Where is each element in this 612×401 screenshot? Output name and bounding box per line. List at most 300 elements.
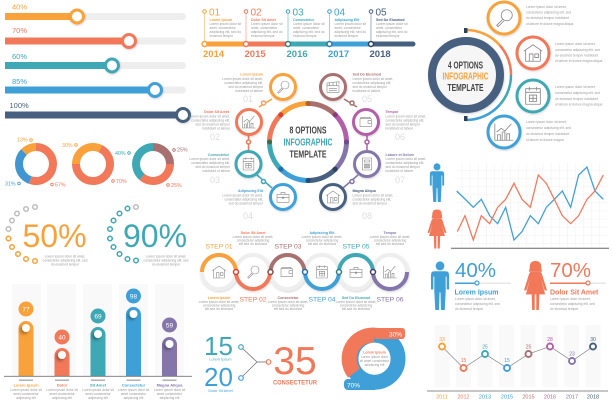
data values (439, 337, 596, 364)
title: TEMPLATE (448, 83, 484, 94)
column labels: Sit Amet (90, 382, 107, 388)
column 5 (162, 318, 177, 376)
step top notes: elit sed do eiusmod (239, 242, 267, 246)
milestone 2018: 05 (376, 8, 387, 18)
gray rings (202, 255, 407, 289)
bar 70%: 70% (12, 26, 27, 35)
step top notes: Lorem ipsum dolor sit amet, (302, 235, 342, 239)
option 5: incididunt ut labore (352, 89, 380, 93)
data values: 15 (461, 358, 466, 364)
dot ring (108, 205, 138, 263)
caption: Lorem ipsum dolor sit amet, (146, 254, 186, 258)
year labels: 2018 (587, 394, 599, 400)
step bottom notes: Lorem ipsum dolor sit amet, (268, 300, 308, 304)
option: search (488, 2, 573, 34)
step headings: STEP 06 (376, 296, 404, 304)
blue segment 70% (344, 335, 398, 390)
label: Dolor Sit Amet (550, 290, 599, 296)
donut 1: 13% (17, 138, 28, 144)
milestone 2016: Lorem ipsum dolor sit (293, 22, 325, 26)
data values: 30 (590, 337, 596, 343)
option: search: Lorem ipsum dolor sit amet, (526, 5, 567, 9)
column 2: 40 (58, 334, 66, 342)
step bottom notes: Lorem ipsum dolor sit amet, (199, 300, 239, 304)
step icons (212, 265, 397, 278)
milestone 2018: adipiscing elit, sed do (376, 30, 408, 34)
option 7: Labore et Dolore (386, 153, 414, 157)
milestone 2014: 01 (209, 8, 221, 18)
option 2 (189, 110, 262, 142)
option: house: consectetur adipiscing elit, sed (555, 48, 600, 52)
icon: female large (524, 261, 547, 310)
connectors (246, 99, 369, 188)
milestone 2015: adipiscing elit, sed do (251, 30, 283, 34)
option 4: sed do eiusmod tempor (229, 202, 264, 206)
option 7: 07 (395, 175, 405, 185)
milestone 2014: adipiscing elit, sed do (210, 30, 241, 34)
panel: timeline (202, 8, 413, 60)
step bottom notes: elit sed do eiusmod (205, 307, 233, 311)
center note: adipiscing elit (365, 363, 384, 367)
donut 2 (62, 143, 127, 185)
donut 3: 25% (177, 148, 188, 154)
number 15: 15 (204, 331, 233, 361)
option 4: Lorem ipsum dolor sit amet, (222, 194, 263, 198)
data points (439, 344, 596, 371)
step top notes: Lorem ipsum dolor sit amet, (233, 235, 273, 239)
value: 50% (22, 218, 87, 254)
step top notes (233, 231, 410, 246)
caption: do eiusmod tempor (51, 262, 80, 266)
milestone 2014: 2014 (203, 49, 225, 60)
step headings: STEP 03 (274, 244, 302, 250)
option 6: Tempor (386, 110, 399, 114)
icon: male large (431, 261, 449, 310)
panel: column chart (4, 284, 192, 400)
column labels: amet consectetur (121, 392, 147, 396)
year labels: 2015 (501, 394, 513, 400)
column labels: Lorem Ipsum (13, 382, 39, 388)
option 2: Dolor Sit Amet (204, 110, 230, 114)
bar 60%: 60% (12, 52, 27, 61)
number 15: Lorem Ipsum (209, 358, 232, 362)
column labels: adipiscing elit (16, 396, 36, 400)
column labels: Lorem ipsum dolor sit (82, 388, 114, 392)
option 1: Lorem ipsum dolor sit amet, (222, 77, 263, 81)
panel: big numbers (204, 331, 317, 393)
panel: steps (199, 231, 410, 311)
option 4 (222, 184, 296, 221)
milestone 2014: Lorem Ipsum (210, 18, 232, 22)
option 6: sed do eiusmod tempor (386, 122, 421, 126)
milestone 2014: eiusmod tempor (210, 34, 234, 38)
option 4: consectetur adipiscing elit, (224, 198, 263, 202)
caption (43, 254, 88, 266)
center title: TEMPLATE (290, 148, 326, 160)
milestone 2018: 2018 (370, 49, 391, 60)
column 1 (18, 302, 34, 376)
data values: 33 (439, 337, 445, 343)
option 5: consectetur adipiscing elit, (352, 81, 391, 85)
milestone 2018: eiusmod tempor (376, 34, 401, 38)
panel: two-part ring (344, 328, 405, 390)
donut 3: 40% (115, 151, 126, 157)
option 8 (320, 184, 393, 221)
body text (550, 297, 595, 311)
donut 3: 25% (171, 183, 182, 189)
step top notes: Dolor Sit Amet (241, 231, 266, 235)
panel: donut charts (5, 138, 188, 189)
donut 1 (5, 138, 66, 188)
milestone 2018: Sed Do Eiusmod (376, 18, 405, 22)
panel: dotted percent 50 (6, 205, 88, 266)
option 6: consectetur adipiscing elit, (386, 118, 424, 122)
option: search: do eiusmod tempor incididunt (526, 16, 569, 20)
number 35: 35 (273, 340, 317, 383)
step bottom notes: elit sed do eiusmod (274, 307, 302, 311)
option: chart: do eiusmod tempor incididunt (526, 132, 569, 136)
milestone 2018: amet, consectetur (376, 26, 403, 30)
option: chart: Lorem ipsum dolor sit amet, (526, 120, 567, 124)
option: calendar: ut labore et dolore magna aliqua (555, 102, 602, 106)
icon: male (430, 163, 444, 202)
step bottom notes: consectetur adipiscing (340, 304, 372, 308)
red segment 30% (349, 328, 405, 373)
center title (284, 124, 333, 160)
column labels: Lorem ipsum dolor sit (154, 388, 185, 392)
panel: 8 options circle (189, 72, 426, 221)
year labels (436, 394, 599, 400)
red line (457, 175, 603, 240)
milestone 2015: Lorem ipsum dolor sit (251, 22, 283, 26)
panel: 4 options circle (432, 2, 602, 148)
option 7: incididunt ut labore (386, 169, 413, 173)
milestone 2014: Lorem ipsum dolor sit (210, 22, 241, 26)
option 3: consectetur adipiscing elit, (191, 161, 230, 165)
step top notes: consectetur adipiscing (306, 238, 338, 242)
option 7: Lorem ipsum dolor sit amet, (386, 157, 426, 161)
bar 70% (5, 26, 186, 48)
option 5 (320, 72, 393, 104)
milestone 2017: Adipiscing Elit (334, 18, 360, 22)
year labels: 2011 (436, 394, 448, 400)
option: chart (488, 116, 571, 148)
option 8: Lorem ipsum dolor sit amet, (352, 194, 393, 198)
option 7: sed do eiusmod tempor (386, 165, 421, 169)
value: 90% (123, 218, 187, 254)
milestone 2015: Dolor Sit Amet (251, 18, 277, 22)
option 4: Adipiscing Elit (238, 189, 264, 193)
milestone 2015: 02 (250, 8, 262, 18)
data values: 23 (569, 352, 575, 358)
option 3: incididunt ut labore (202, 169, 230, 173)
option 2: sed do eiusmod tempor (196, 122, 231, 126)
caption: consectetur adipiscing elit, sed (144, 258, 189, 262)
data values: 25 (482, 344, 488, 350)
panel: female stat (524, 259, 606, 311)
labels: 70% (347, 382, 360, 390)
option 6: incididunt ut labore (386, 126, 413, 130)
year labels: 2017 (566, 394, 578, 400)
body text: consectetur adipiscing elit, sed (550, 302, 595, 306)
donut 2: 70% (116, 179, 127, 185)
donut 3 (115, 147, 188, 189)
step bottom notes: consectetur adipiscing (272, 304, 304, 308)
column 4 (126, 288, 141, 376)
dot ring (6, 205, 37, 263)
column 5: 59 (166, 322, 173, 330)
column labels: amet consectetur (49, 392, 76, 396)
option: house (517, 37, 602, 69)
bar 40%: 40% (12, 2, 27, 12)
icon: female (428, 210, 446, 248)
bar 60% (5, 52, 186, 72)
trend line (442, 346, 593, 368)
milestone 2017: eiusmod tempor (334, 34, 359, 38)
column labels (10, 380, 185, 400)
milestone 2016: amet, consectetur (293, 26, 320, 30)
milestone 2017 (327, 8, 366, 60)
year labels: 2012 (457, 394, 470, 400)
step top notes: Adipiscing Elit (310, 231, 335, 235)
option 4: 04 (243, 211, 253, 221)
column labels: adipiscing elit (52, 396, 72, 400)
body text: do eiusmod tempor (550, 307, 579, 311)
center note (358, 343, 390, 375)
option 1: incididunt ut labore (235, 89, 263, 93)
option 1: consectetur adipiscing elit, (224, 81, 263, 85)
panel: dotted percent 90 (108, 205, 189, 266)
body text: Lorem ipsum dolor sit amet, (455, 297, 496, 301)
option: chart: consectetur adipiscing elit, sed (526, 126, 571, 130)
step top notes: Lorem ipsum dolor sit amet, (370, 235, 410, 239)
column labels: Lorem ipsum dolor sit (118, 388, 149, 392)
milestone 2018 (368, 8, 408, 60)
option: search: consectetur adipiscing elit, sed (526, 10, 571, 14)
step bottom notes: Sed Do Eiusmod (342, 296, 370, 300)
milestone 2016: 2016 (286, 49, 308, 60)
option: calendar: Lorem ipsum dolor sit amet, (555, 85, 596, 89)
timeline bar (204, 42, 413, 46)
step top notes: elit sed do eiusmod (376, 242, 404, 246)
bar 85% (5, 77, 186, 96)
step bottom notes: consectetur adipiscing (203, 304, 235, 308)
option: search: ut labore et dolore magna aliqua (526, 22, 573, 26)
bar 85%: 85% (12, 77, 27, 86)
number 20: 20 (204, 362, 233, 392)
number 35: CONSECTETUR (273, 380, 317, 386)
option: house: do eiusmod tempor incididunt (555, 54, 598, 58)
option 5: Sed Do Eiusmod (352, 72, 381, 76)
caption: Lorem ipsum dolor sit amet, (45, 254, 85, 258)
title: INFOGRAPHIC (442, 72, 488, 82)
option: chart: ut labore et dolore magna (526, 138, 564, 142)
option 8: 08 (362, 211, 372, 221)
option: house: ut labore et dolore magna aliqua (555, 59, 602, 63)
column labels: Dolor (57, 382, 68, 388)
step top notes: consectetur adipiscing (237, 238, 269, 242)
year labels: 2016 (544, 394, 556, 400)
option 8: sed do eiusmod tempor (352, 202, 388, 206)
labels: 30% (389, 332, 402, 338)
background columns (434, 325, 600, 387)
option 3: Consectetur (208, 153, 230, 157)
milestone 2017: amet, consectetur (334, 26, 362, 30)
data values: 28 (547, 337, 553, 343)
milestone 2016: 03 (292, 8, 304, 18)
center note: Lorem Ipsum (363, 350, 386, 354)
labels (347, 332, 402, 390)
junction rings (234, 270, 376, 274)
step bottom notes: elit sed do eiusmod (342, 307, 370, 311)
option 2: incididunt ut labore (202, 126, 230, 130)
option 1: sed do eiusmod tempor (229, 85, 264, 89)
step bottom notes (199, 296, 376, 311)
milestone 2015: eiusmod tempor (251, 34, 276, 38)
year labels: 2015 (522, 394, 535, 400)
milestone 2017: Lorem ipsum dolor sit (334, 22, 366, 26)
step headings: STEP 05 (342, 244, 370, 250)
donut 1: 31% (5, 182, 16, 188)
title: 4 OPTIONS (448, 60, 483, 72)
option: calendar (517, 80, 602, 112)
step bottom notes: Lorem Ipsum (208, 296, 230, 300)
step headings: STEP 04 (308, 296, 336, 304)
milestone 2015 (244, 8, 283, 60)
milestone 2016: Consectetur (293, 18, 315, 22)
caption: do eiusmod tempor (152, 262, 181, 266)
column labels: adipiscing elit (160, 396, 179, 400)
option 1: Lorem Ipsum (240, 72, 263, 76)
step top notes: consectetur adipiscing (374, 238, 406, 242)
slider (455, 281, 511, 285)
option 1: 01 (243, 94, 253, 104)
data values: 25 (526, 344, 531, 350)
data values: 15 (504, 358, 510, 364)
option 1 (222, 72, 296, 104)
year labels: 2013 (479, 394, 491, 400)
column 3: 69 (94, 314, 102, 320)
step bottom notes: Consectetur (278, 296, 299, 300)
option 3 (189, 152, 261, 185)
step top notes: Tempor (384, 231, 397, 235)
option: calendar: consectetur adipiscing elit, sed (555, 91, 600, 95)
milestone 2015: 2015 (244, 49, 266, 60)
milestone 2015: amet, consectetur (251, 26, 278, 30)
milestone 2016: eiusmod tempor (293, 34, 318, 38)
panel: male stat (431, 259, 511, 311)
option 5: 05 (362, 94, 372, 104)
background columns (12, 284, 184, 376)
option 6 (354, 110, 426, 142)
slider (550, 281, 606, 285)
milestone 2018: Lorem ipsum dolor sit (376, 22, 408, 26)
center title: INFOGRAPHIC (284, 136, 333, 148)
label: Lorem Ipsum (454, 290, 498, 296)
column labels: amet consectetur (157, 392, 183, 396)
body text: do eiusmod tempor (455, 307, 484, 311)
center note: Lorem ipsum dolor (361, 355, 389, 359)
outer arc (464, 28, 511, 121)
donut 1: 67% (55, 182, 66, 188)
column 2 (54, 330, 70, 376)
donut 2: 30% (62, 143, 73, 149)
option 3: 03 (210, 175, 220, 185)
caption (144, 254, 189, 266)
option 7 (354, 152, 426, 185)
option 5: sed do eiusmod tempor (352, 85, 388, 89)
panel: progress bars (5, 2, 190, 122)
connector (239, 345, 271, 380)
milestone 2014 (202, 8, 241, 60)
column labels: adipiscing elit (88, 396, 108, 400)
milestone 2016: adipiscing elit, sed do (293, 30, 325, 34)
main ring (432, 41, 500, 109)
value: 70% (550, 259, 591, 282)
colored arcs (202, 255, 407, 289)
option 8: consectetur adipiscing elit, (352, 198, 391, 202)
step headings (205, 244, 404, 304)
milestone 2014: amet, consectetur (210, 26, 237, 30)
option 8: Magna Aliqua (352, 189, 377, 193)
option 3: Lorem ipsum dolor sit amet, (189, 157, 230, 161)
option 5: Lorem ipsum dolor sit amet, (352, 77, 393, 81)
option: calendar: do eiusmod tempor incididunt (555, 97, 598, 101)
option 3: sed do eiusmod tempor (196, 165, 231, 169)
option 2: 02 (210, 132, 220, 142)
body text: Lorem ipsum dolor sit amet, (550, 297, 591, 301)
column labels: Lorem ipsum dolor sit (46, 388, 78, 392)
column labels: Lorem ipsum dolor sit (10, 388, 42, 392)
title (442, 60, 488, 94)
central ring (270, 104, 346, 180)
value: 40% (455, 259, 496, 282)
bar 40% (5, 2, 186, 23)
center title: 8 OPTIONS (290, 124, 326, 136)
milestone 2016 (286, 8, 325, 60)
body text (455, 297, 500, 311)
chart grid (457, 163, 607, 247)
panel: year line chart (427, 325, 608, 400)
panel: line chart with people (428, 163, 609, 248)
step headings: STEP 01 (205, 244, 233, 250)
bar 100%: 100% (10, 101, 29, 110)
column labels: amet consectetur (85, 392, 112, 396)
option 6: 06 (395, 132, 405, 142)
center note: sit amet consectetur (360, 359, 390, 363)
blue line (457, 167, 603, 240)
caption: consectetur adipiscing elit, sed (43, 258, 88, 262)
column 3 (90, 308, 106, 376)
option 6: Lorem ipsum dolor sit amet, (386, 114, 426, 118)
step bottom notes: Lorem ipsum dolor sit amet, (336, 300, 376, 304)
column 1: 77 (22, 306, 30, 314)
column labels: Consectetur (122, 382, 146, 388)
option 7: consectetur adipiscing elit, (386, 161, 424, 165)
option 2: consectetur adipiscing elit, (191, 118, 230, 122)
option: house: Lorem ipsum dolor sit amet, (555, 42, 596, 46)
bar 100% (5, 101, 190, 122)
milestone 2017: 2017 (328, 49, 349, 60)
column 4: 98 (130, 294, 137, 300)
step headings: STEP 02 (239, 296, 267, 304)
column labels: amet consectetur (13, 392, 40, 396)
column labels: adipiscing elit (124, 396, 143, 400)
ring joints (267, 101, 349, 183)
option 2: Lorem ipsum dolor sit amet, (189, 114, 230, 118)
milestone 2017: 04 (334, 8, 346, 18)
body text: consectetur adipiscing elit, sed (455, 302, 500, 306)
